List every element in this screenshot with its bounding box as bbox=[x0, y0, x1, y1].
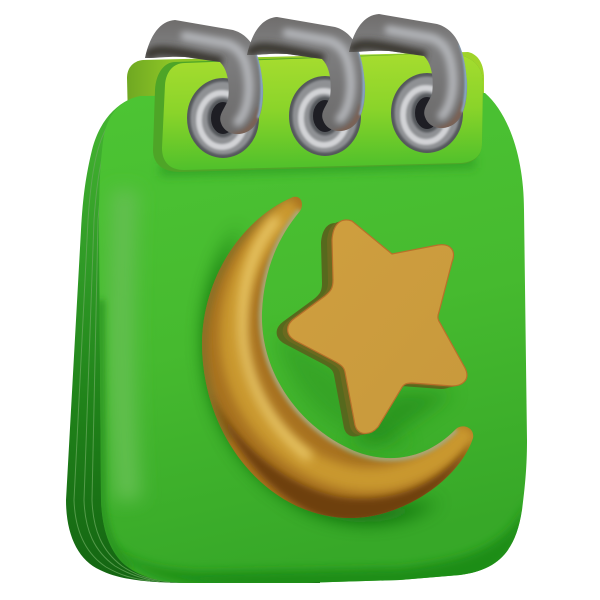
gold body bbox=[232, 205, 470, 480]
header tab face bbox=[162, 53, 483, 170]
star shadow bbox=[350, 392, 455, 445]
bottom edge shading bbox=[124, 506, 522, 583]
ring 2 link bbox=[247, 17, 365, 133]
star face bbox=[288, 220, 467, 434]
back edge of header tab bbox=[127, 52, 484, 140]
left edge highlight bbox=[122, 190, 128, 500]
star mid extrusion bbox=[283, 221, 462, 435]
inner edge reflection bbox=[262, 211, 456, 458]
star side bbox=[277, 223, 456, 437]
ring 1 link bbox=[145, 20, 263, 136]
header shadow bbox=[160, 162, 475, 170]
ring 3 base bbox=[403, 85, 451, 142]
header tab side bbox=[153, 53, 483, 172]
crescent moon bbox=[202, 197, 474, 522]
illustration: calendar with crescent and star bbox=[66, 14, 527, 583]
main highlight bbox=[243, 218, 310, 458]
inner crescent shade bbox=[279, 342, 344, 426]
crescent shadow bbox=[204, 225, 440, 522]
left olive rim bbox=[203, 198, 290, 440]
outer dark rim bbox=[216, 406, 471, 518]
ring 1 base bbox=[199, 90, 247, 147]
ring 3 link bbox=[349, 14, 467, 130]
calendar front page bbox=[99, 93, 527, 583]
back pages of calendar bbox=[66, 96, 320, 583]
ring 2 base bbox=[301, 88, 349, 145]
left edge shading bbox=[101, 300, 130, 568]
